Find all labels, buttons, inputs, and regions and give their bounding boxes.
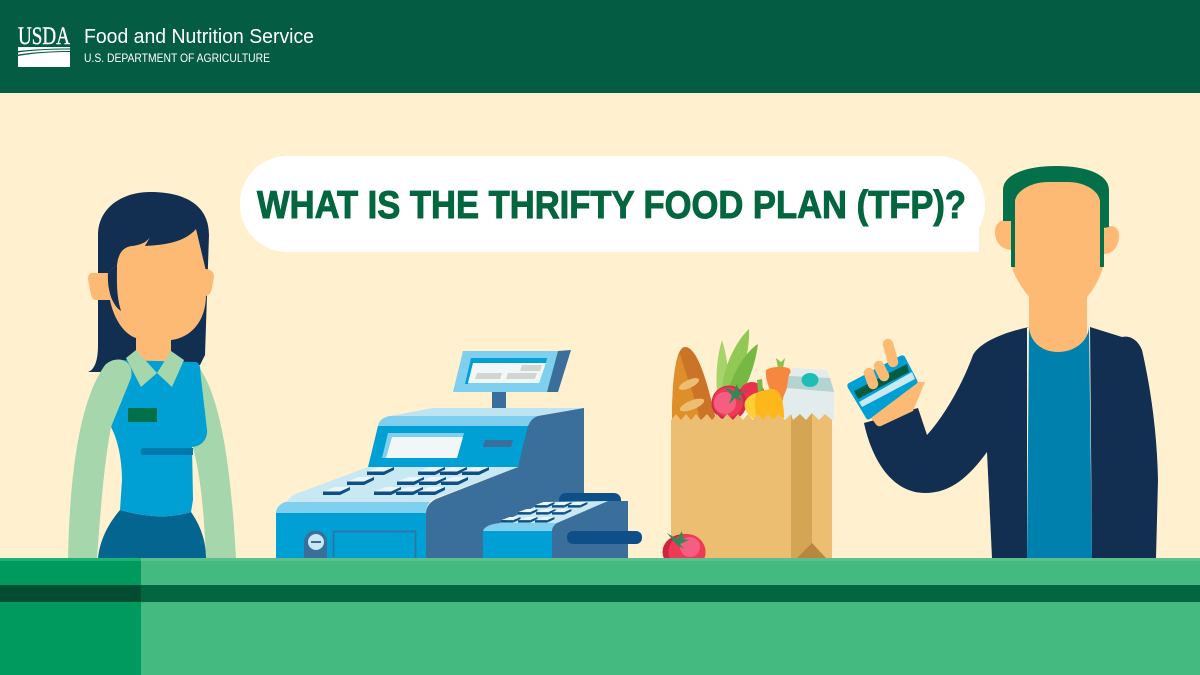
credit card bbox=[847, 355, 918, 420]
bell pepper bbox=[745, 379, 784, 420]
tomato behind bbox=[739, 382, 765, 408]
counter stripe bbox=[141, 585, 1200, 602]
register slot bbox=[483, 440, 513, 447]
carrot bbox=[766, 358, 792, 402]
hair strand bbox=[108, 265, 121, 311]
right sleeve bbox=[192, 367, 236, 558]
baguette bbox=[672, 347, 716, 420]
vest bbox=[111, 360, 207, 516]
counter left block bbox=[0, 558, 141, 675]
hand palm bbox=[866, 382, 925, 426]
face and neck bbox=[108, 229, 206, 375]
grocery bag bbox=[671, 329, 834, 558]
collar bbox=[126, 350, 184, 387]
cash register bbox=[276, 350, 642, 562]
milk carton bbox=[783, 368, 834, 420]
key lock bbox=[304, 530, 327, 558]
card keypad bbox=[483, 493, 642, 558]
tomato on counter bbox=[662, 531, 706, 570]
bag fold bbox=[797, 543, 826, 558]
ears bbox=[88, 269, 214, 300]
USDA logo bbox=[18, 23, 70, 67]
pocket bbox=[141, 448, 193, 455]
agency name: Food and Nutrition Service bbox=[84, 26, 314, 48]
tomato in bag bbox=[712, 384, 747, 420]
customer man bbox=[847, 166, 1158, 558]
monitor bbox=[453, 350, 571, 409]
cash drawer bbox=[334, 532, 416, 562]
title: WHAT IS THE THRIFTY FOOD PLAN (TFP)? bbox=[257, 184, 966, 227]
left sleeve bbox=[68, 359, 132, 558]
hair bbox=[1003, 166, 1109, 267]
fingers bbox=[869, 344, 893, 384]
cashier woman bbox=[68, 192, 236, 558]
counter bbox=[0, 558, 1200, 675]
hair back bbox=[88, 192, 209, 372]
bag side bbox=[791, 413, 812, 558]
speech bubble with title bbox=[240, 156, 985, 252]
jacket bbox=[864, 327, 1158, 558]
USDA logo: USDA bbox=[18, 23, 70, 50]
header band bbox=[0, 0, 1200, 93]
register keys bbox=[323, 467, 489, 495]
department name: U.S. DEPARTMENT OF AGRICULTURE bbox=[84, 53, 270, 65]
register body bbox=[378, 408, 584, 426]
register screen bbox=[382, 433, 464, 458]
skirt bbox=[98, 510, 206, 558]
bag front bbox=[671, 414, 791, 558]
ears bbox=[995, 220, 1119, 254]
name tag bbox=[128, 408, 157, 422]
leafy greens bbox=[717, 329, 758, 392]
face and neck bbox=[1012, 182, 1103, 355]
t-shirt bbox=[1027, 327, 1092, 558]
